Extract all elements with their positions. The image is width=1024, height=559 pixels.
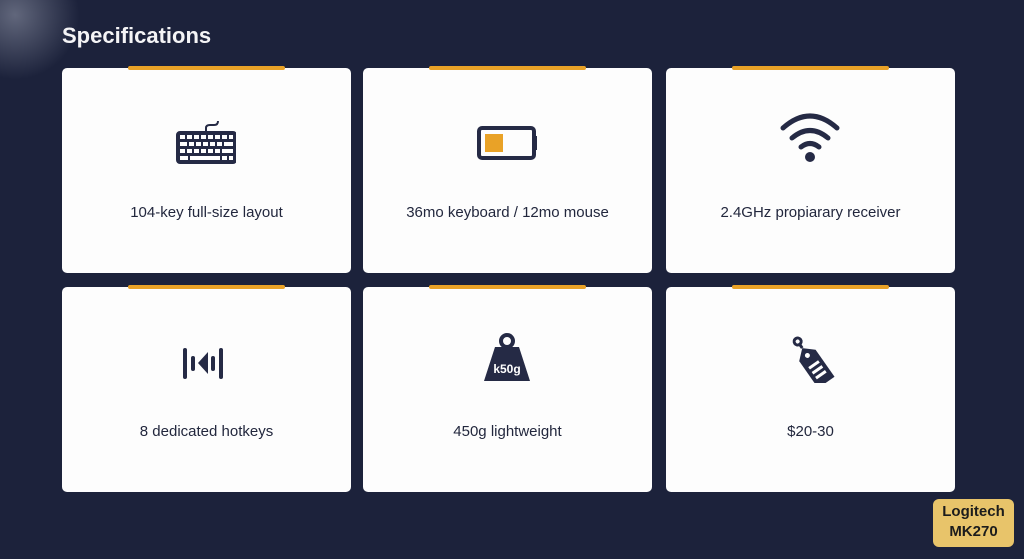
badge xyxy=(933,499,1014,547)
icon: weight xyxy=(484,333,530,381)
label: 36mo keyboard / 12mo mouse xyxy=(406,204,609,221)
label: 104-key full-size layout xyxy=(130,204,283,221)
label: 2.4GHz propiarary receiver xyxy=(720,204,901,221)
icon: wifi xyxy=(780,113,840,162)
icon: battery xyxy=(477,126,537,160)
card: battery xyxy=(363,68,652,273)
card: weight xyxy=(363,287,652,492)
badge: MK270 xyxy=(949,523,998,540)
badge: Logitech xyxy=(942,503,1005,520)
icon: weight: k50g xyxy=(493,362,521,376)
icon: hotkeys xyxy=(183,348,223,379)
card: keyboard xyxy=(62,68,351,273)
label: 8 dedicated hotkeys xyxy=(140,423,273,440)
card: hotkeys xyxy=(62,287,351,492)
icon: price tag xyxy=(792,336,834,383)
label: 450g lightweight xyxy=(453,423,562,440)
card: price xyxy=(666,287,955,492)
icon: keyboard xyxy=(176,121,236,164)
label: $20-30 xyxy=(787,423,834,440)
card: wireless xyxy=(666,68,955,273)
title: Specifications xyxy=(62,23,211,48)
